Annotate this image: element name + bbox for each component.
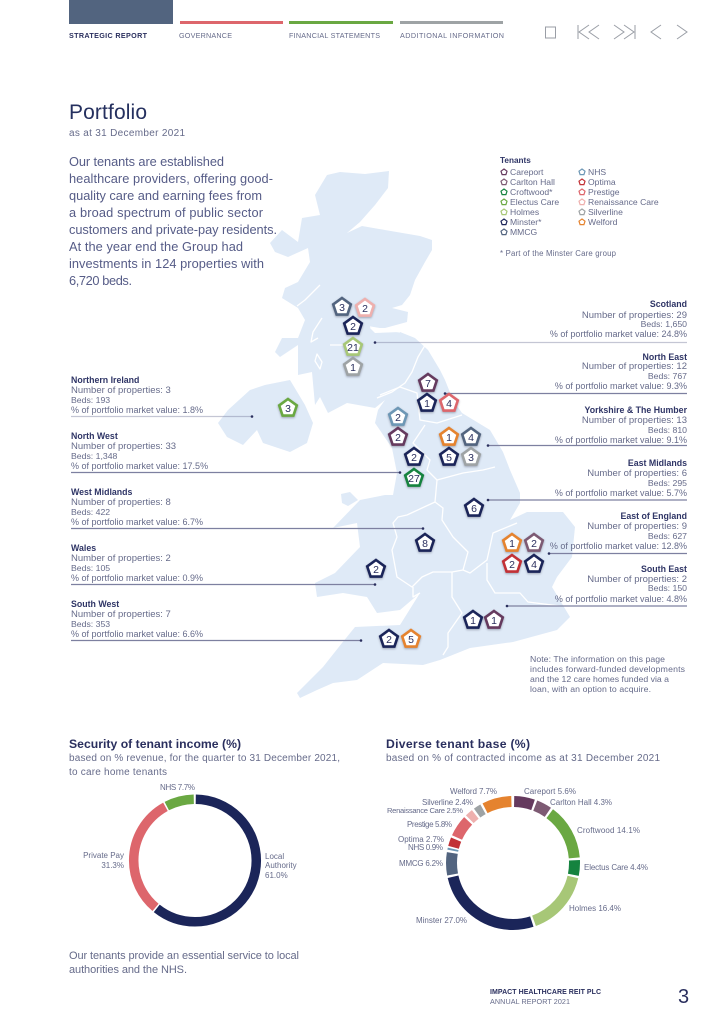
- map note: Note: The information on this page: [530, 654, 665, 664]
- property count markers: 21: [347, 342, 359, 354]
- intro paragraph: At the year end the Group had: [69, 239, 243, 254]
- region: Wales: [71, 543, 203, 583]
- region: West Midlands: West Midlands: [71, 487, 133, 497]
- property count markers: 4: [446, 398, 452, 410]
- donut labels: NHS 7.7%: [160, 783, 195, 792]
- region: South East: Number of properties: 2: [587, 574, 687, 585]
- region: South West: % of portfolio market value: 6.6%: [71, 629, 203, 639]
- region: South West: South West: [71, 599, 119, 609]
- subtitle date: as at 31 December 2021: [69, 128, 185, 139]
- financial statements tab bar: [289, 21, 393, 24]
- donut labels: Authority: [265, 861, 297, 870]
- intro paragraph: Our tenants are established: [69, 154, 224, 169]
- region: East of England: Beds: 627: [648, 531, 687, 541]
- property count markers: 5: [446, 452, 452, 464]
- property count markers: 8: [422, 538, 428, 550]
- additional information tab label: ADDITIONAL INFORMATION: [400, 31, 504, 40]
- region: Northern Ireland: Beds: 193: [71, 395, 110, 405]
- region: Northern Ireland: [71, 375, 203, 415]
- property count markers: 4: [531, 559, 537, 571]
- legend column 1: Electus Care: [510, 197, 559, 207]
- legend column 2: [579, 167, 659, 227]
- region: East of England: East of England: [621, 511, 687, 521]
- region: Scotland: Beds: 1,650: [641, 319, 687, 329]
- region: Scotland: Number of properties: 29: [582, 310, 687, 321]
- legend column 2: Optima: [588, 177, 616, 187]
- region: Northern Ireland: Northern Ireland: [71, 375, 139, 385]
- property count markers: 27: [408, 473, 420, 485]
- map: Anglesey: [341, 492, 358, 506]
- donut labels: Renaissance Care 2.5%: [387, 806, 463, 815]
- region: Yorkshire & The Humber: Yorkshire & The Humber: [584, 405, 688, 415]
- region: Wales: Number of properties: 2: [71, 553, 171, 564]
- donut labels: Electus Care 4.4%: [584, 863, 648, 872]
- legend column 2: Renaissance Care: [588, 197, 659, 207]
- property count markers: 7: [425, 378, 431, 390]
- property count markers: 1: [491, 615, 497, 627]
- navigation icons: [546, 25, 687, 39]
- panel: diverse tenant base: [386, 737, 660, 925]
- region: North West: % of portfolio market value: 17.5%: [71, 461, 208, 471]
- region: North East: Number of properties: 12: [582, 361, 687, 372]
- property count markers: 2: [373, 564, 379, 576]
- region: Yorkshire & The Humber: % of portfolio market value: 9.1%: [555, 435, 687, 445]
- property count markers: 3: [468, 452, 474, 464]
- region: South East: Beds: 150: [648, 583, 687, 593]
- property count markers: 1: [446, 432, 452, 444]
- description: based on % of contracted income as at 31 December 2021: [386, 753, 660, 764]
- property count markers: 2: [395, 432, 401, 444]
- property count markers: 2: [362, 303, 368, 315]
- property count markers: 3: [339, 302, 345, 314]
- intro paragraph: customers and private-pay residents.: [69, 222, 277, 237]
- region: South West: Beds: 353: [71, 619, 110, 629]
- region: South West: [71, 599, 203, 639]
- legend column 2: Silverline: [588, 207, 623, 217]
- legend column 2: Welford: [588, 217, 618, 227]
- UK map: [71, 171, 687, 698]
- property count markers: 1: [424, 398, 430, 410]
- legend footnote: * Part of the Minster Care group: [500, 249, 617, 258]
- region: East Midlands: East Midlands: [628, 458, 687, 468]
- property count markers: 4: [468, 432, 474, 444]
- description: to care home tenants: [69, 767, 167, 778]
- property count markers: 1: [350, 362, 356, 374]
- map note: includes forward-funded developments: [530, 664, 686, 674]
- closing statement: [69, 950, 299, 976]
- region: East Midlands: Number of properties: 6: [587, 468, 687, 479]
- map note: and the 12 care homes funded via a: [530, 674, 669, 684]
- legend column 1: [501, 167, 559, 237]
- region: North East: [555, 352, 687, 391]
- map note: loan, with an option to acquire.: [530, 684, 651, 694]
- map: Northern Ireland: [218, 380, 313, 452]
- intro paragraph: investments in 124 properties with: [69, 256, 264, 271]
- region: East of England: % of portfolio market value: 12.8%: [550, 541, 687, 551]
- heading: Diverse tenant base (%): [386, 737, 530, 751]
- description: based on % revenue, for the quarter to 31 December 2021,: [69, 753, 340, 764]
- region: Scotland: [550, 299, 687, 339]
- region: Yorkshire & The Humber: Beds: 810: [648, 425, 687, 435]
- donut labels: Local: [265, 852, 284, 861]
- map note: [530, 654, 686, 694]
- region: West Midlands: [71, 487, 203, 527]
- donut labels: Optima 2.7%: [398, 835, 444, 844]
- additional information tab bar: [400, 21, 503, 24]
- pointer lines: [71, 341, 687, 642]
- donut chart: income sources: [134, 799, 256, 922]
- property count markers: 1: [509, 538, 515, 550]
- property count markers: 2: [509, 559, 515, 571]
- region: South West: Number of properties: 7: [71, 609, 171, 620]
- property count markers: 2: [350, 321, 356, 333]
- region: North West: Number of properties: 33: [71, 441, 176, 452]
- property count markers: 6: [471, 503, 477, 515]
- property count markers: 1: [470, 615, 476, 627]
- property count markers: 2: [395, 412, 401, 424]
- donut labels: 61.0%: [265, 871, 288, 880]
- legend column 1: Carlton Hall: [510, 177, 555, 187]
- donut chart: tenants: [452, 802, 574, 924]
- region: South East: [555, 564, 687, 604]
- region: East Midlands: Beds: 295: [648, 478, 687, 488]
- region: East of England: Number of properties: 9: [587, 521, 687, 532]
- region: Yorkshire & The Humber: Number of properties: 13: [582, 415, 687, 426]
- governance tab label: GOVERNANCE: [179, 31, 232, 40]
- property count markers: 2: [386, 634, 392, 646]
- region: Scotland: % of portfolio market value: 24.8%: [550, 329, 687, 339]
- region: Wales: Beds: 105: [71, 563, 110, 573]
- tenants legend: [500, 156, 659, 258]
- legend column 2: NHS: [588, 167, 606, 177]
- donut labels: NHS 0.9%: [408, 843, 443, 852]
- region: Scotland: Scotland: [650, 299, 687, 309]
- region: West Midlands: % of portfolio market value: 6.7%: [71, 517, 203, 527]
- footer: [490, 986, 689, 1008]
- intro paragraph: healthcare providers, offering good-: [69, 171, 273, 186]
- donut labels: [83, 783, 297, 880]
- active tab block: [69, 0, 173, 24]
- closing statement: Our tenants provide an essential service to local: [69, 950, 299, 962]
- intro paragraph: quality care and earning fees from: [69, 188, 262, 203]
- donut labels: MMCG 6.2%: [399, 859, 443, 868]
- closing statement: authorities and the NHS.: [69, 964, 187, 976]
- legend column 1: Croftwood*: [510, 187, 553, 197]
- region: Yorkshire & The Humber: [555, 405, 688, 445]
- region: South East: South East: [641, 564, 687, 574]
- legend column 1: Holmes: [510, 207, 539, 217]
- financial statements tab label: FINANCIAL STATEMENTS: [289, 31, 380, 40]
- panel: security of tenant income: [69, 737, 340, 922]
- donut labels: Minster 27.0%: [416, 916, 467, 925]
- heading: Security of tenant income (%): [69, 737, 241, 751]
- company name: IMPACT HEALTHCARE REIT PLC: [490, 989, 601, 996]
- governance tab bar: [180, 21, 283, 24]
- region: East of England: [550, 511, 687, 551]
- region: North East: North East: [643, 352, 687, 362]
- page number: 3: [678, 986, 689, 1008]
- legend column 1: MMCG: [510, 227, 538, 237]
- donut labels: Carlton Hall 4.3%: [550, 798, 612, 807]
- region: Wales: % of portfolio market value: 0.9%: [71, 573, 203, 583]
- region: North West: North West: [71, 431, 118, 441]
- donut labels: Croftwood 14.1%: [577, 826, 640, 835]
- region: North West: Beds: 1,348: [71, 451, 118, 461]
- donut labels: 31.3%: [101, 861, 124, 870]
- region: Wales: Wales: [71, 543, 96, 553]
- legend heading: Tenants: [500, 156, 531, 165]
- property count markers: [279, 298, 543, 647]
- legend column 1: Careport: [510, 167, 544, 177]
- description: [69, 753, 340, 778]
- map: Great Britain landmass: [270, 171, 575, 698]
- region: North West: [71, 431, 208, 471]
- report name: ANNUAL REPORT 2021: [490, 997, 570, 1006]
- property count markers: 2: [411, 452, 417, 464]
- intro paragraph: [69, 154, 277, 288]
- region: West Midlands: Number of properties: 8: [71, 497, 171, 508]
- region: North East: % of portfolio market value: 9.3%: [555, 381, 687, 391]
- donut labels: Welford 7.7%: [450, 787, 497, 796]
- region: East Midlands: [555, 458, 687, 498]
- region: South East: % of portfolio market value: 4.8%: [555, 594, 687, 604]
- intro paragraph: a broad spectrum of public sector: [69, 205, 264, 220]
- region: East Midlands: % of portfolio market value: 5.7%: [555, 488, 687, 498]
- region: Northern Ireland: Number of properties: 3: [71, 385, 171, 396]
- legend column 1: Minster*: [510, 217, 542, 227]
- title: Portfolio: [69, 101, 147, 124]
- donut labels: Holmes 16.4%: [569, 904, 621, 913]
- strategic report tab label: STRATEGIC REPORT: [69, 31, 148, 40]
- donut labels: Prestige 5.8%: [407, 820, 452, 829]
- intro paragraph: 6,720 beds.: [69, 273, 132, 288]
- map: regional boundaries: [377, 342, 560, 655]
- header navigation: [69, 0, 687, 40]
- legend column 2: Prestige: [588, 187, 620, 197]
- region: Northern Ireland: % of portfolio market value: 1.8%: [71, 405, 203, 415]
- map: sea lochs and inlets: [280, 285, 400, 372]
- donut labels: Private Pay: [83, 851, 124, 860]
- donut labels: Silverline 2.4%: [422, 798, 473, 807]
- donut labels: [387, 787, 648, 925]
- region: West Midlands: Beds: 422: [71, 507, 110, 517]
- region: North East: Beds: 767: [648, 371, 687, 381]
- property count markers: 3: [285, 403, 291, 415]
- property count markers: 2: [531, 538, 537, 550]
- donut labels: Careport 5.6%: [524, 787, 576, 796]
- property count markers: 5: [408, 634, 414, 646]
